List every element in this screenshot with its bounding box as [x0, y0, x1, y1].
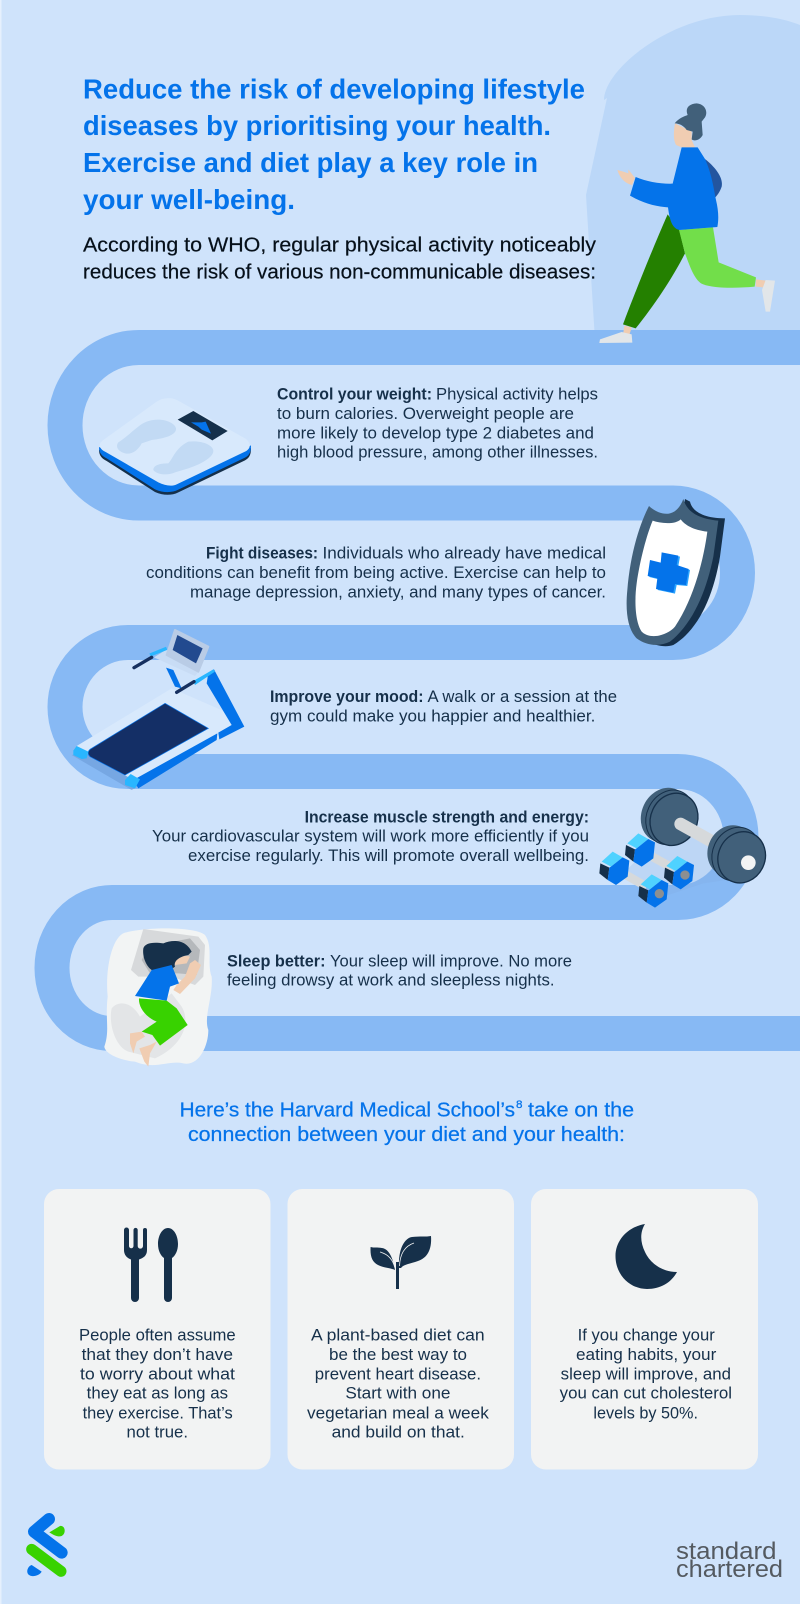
- card text: they eat as long as: [87, 1385, 228, 1403]
- text: fight diseases: Individuals who already have medical: [322, 545, 606, 563]
- card text: they exercise. That’s: [83, 1404, 233, 1422]
- text: sleep better: Your sleep will improve. No more: [330, 952, 572, 970]
- card text: prevent heart disease.: [315, 1365, 481, 1383]
- title: your well-being.: [83, 184, 295, 215]
- winding path: [52, 348, 800, 1034]
- card text: you can cut cholesterol: [560, 1385, 732, 1403]
- panel: plant-based diet card: [288, 1189, 514, 1470]
- panel: eating habits card: [531, 1189, 758, 1470]
- text: improve your mood: Improve your mood:: [270, 688, 424, 706]
- text: control your weight: high blood pressure, among other illnesses.: [277, 444, 598, 462]
- text: increase muscle strength: [152, 808, 589, 865]
- logo: Standard Chartered wordmark: standard: [676, 1538, 776, 1565]
- card text: People often assume: [79, 1327, 236, 1345]
- illustration: treadmill: [72, 630, 244, 790]
- text: increase muscle strength: Your cardiovascular system will work more efficiently if you: [152, 828, 589, 846]
- card text: [79, 1327, 236, 1442]
- text: fight diseases: Fight diseases:: [206, 545, 318, 563]
- icon: fork and spoon: [124, 1228, 178, 1302]
- text: control your weight: Control your weight:: [277, 386, 432, 404]
- heading: Harvard Medical School: 8: [516, 1099, 522, 1111]
- text: increase muscle strength: Increase muscle strength and energy:: [305, 808, 589, 826]
- text: control your weight: to burn calories. Overweight people are: [277, 405, 574, 423]
- card text: and build on that.: [332, 1424, 465, 1442]
- text: sleep better: [227, 952, 572, 990]
- card text: [307, 1327, 490, 1442]
- intro text: reduces the risk of various non-communicable diseases:: [83, 261, 596, 284]
- heading: Harvard Medical School: [180, 1099, 634, 1146]
- card text: that they don’t have: [82, 1346, 233, 1364]
- illustration: weighing scale: [99, 398, 251, 495]
- text: control your weight: Physical activity helps: [436, 386, 598, 404]
- illustration: dumbbells: [599, 780, 774, 908]
- text: improve your mood: gym could make you happier and healthier.: [270, 707, 595, 725]
- title: Reduce the risk of developing lifestyle: [83, 73, 585, 104]
- card text: to worry about what: [80, 1365, 235, 1383]
- card text: [560, 1327, 732, 1422]
- text: improve your mood: A walk or a session at the: [428, 688, 617, 706]
- logo: Standard Chartered wordmark: chartered: [676, 1556, 783, 1583]
- intro text: According to WHO, regular physical activity noticeably: [83, 234, 597, 257]
- title: Exercise and diet play a key role in: [83, 147, 538, 178]
- text: fight diseases: conditions can benefit from being active. Exercise can help to: [146, 564, 606, 582]
- card text: vegetarian meal a week: [307, 1404, 490, 1422]
- text: improve your mood: [270, 688, 617, 725]
- card text: Start with one: [345, 1385, 450, 1403]
- illustration: sleeping person: [104, 928, 212, 1067]
- illustration: runner: [599, 103, 775, 343]
- text: fight diseases: [146, 545, 606, 601]
- card text: sleep will improve, and: [561, 1365, 731, 1383]
- card text: If you change your: [578, 1327, 715, 1345]
- card text: not true.: [126, 1424, 188, 1442]
- illustration: shield: [627, 499, 725, 646]
- heading: Harvard Medical School: take on the: [528, 1099, 634, 1122]
- title: [83, 73, 585, 215]
- logo: Standard Chartered symbol: [27, 1519, 65, 1576]
- icon: sprout: [370, 1236, 431, 1289]
- background blob behind runner: [586, 15, 800, 340]
- icon: crescent moon: [616, 1224, 677, 1289]
- intro text: [83, 234, 597, 284]
- panel: exercise myth card: [44, 1189, 270, 1470]
- heading: Harvard Medical School: connection between your diet and your health:: [188, 1123, 625, 1146]
- title: diseases by prioritising your health.: [83, 110, 551, 141]
- text: control your weight: more likely to develop type 2 diabetes and: [277, 424, 594, 442]
- heading: Harvard Medical School: Here’s the Harvard Medical School’s: [180, 1099, 515, 1122]
- text: control your weight: [277, 386, 598, 462]
- text: sleep better: Sleep better:: [227, 952, 326, 970]
- text: sleep better: feeling drowsy at work and sleepless nights.: [227, 972, 555, 990]
- card text: be the best way to: [329, 1346, 467, 1364]
- card text: levels by 50%.: [593, 1404, 698, 1422]
- logo: Standard Chartered wordmark: [676, 1538, 783, 1583]
- card text: A plant-based diet can: [311, 1327, 485, 1345]
- card text: eating habits, your: [576, 1346, 717, 1364]
- text: increase muscle strength: exercise regularly. This will promote overall wellbeing.: [188, 847, 589, 865]
- text: fight diseases: manage depression, anxiety, and many types of cancer.: [190, 583, 606, 601]
